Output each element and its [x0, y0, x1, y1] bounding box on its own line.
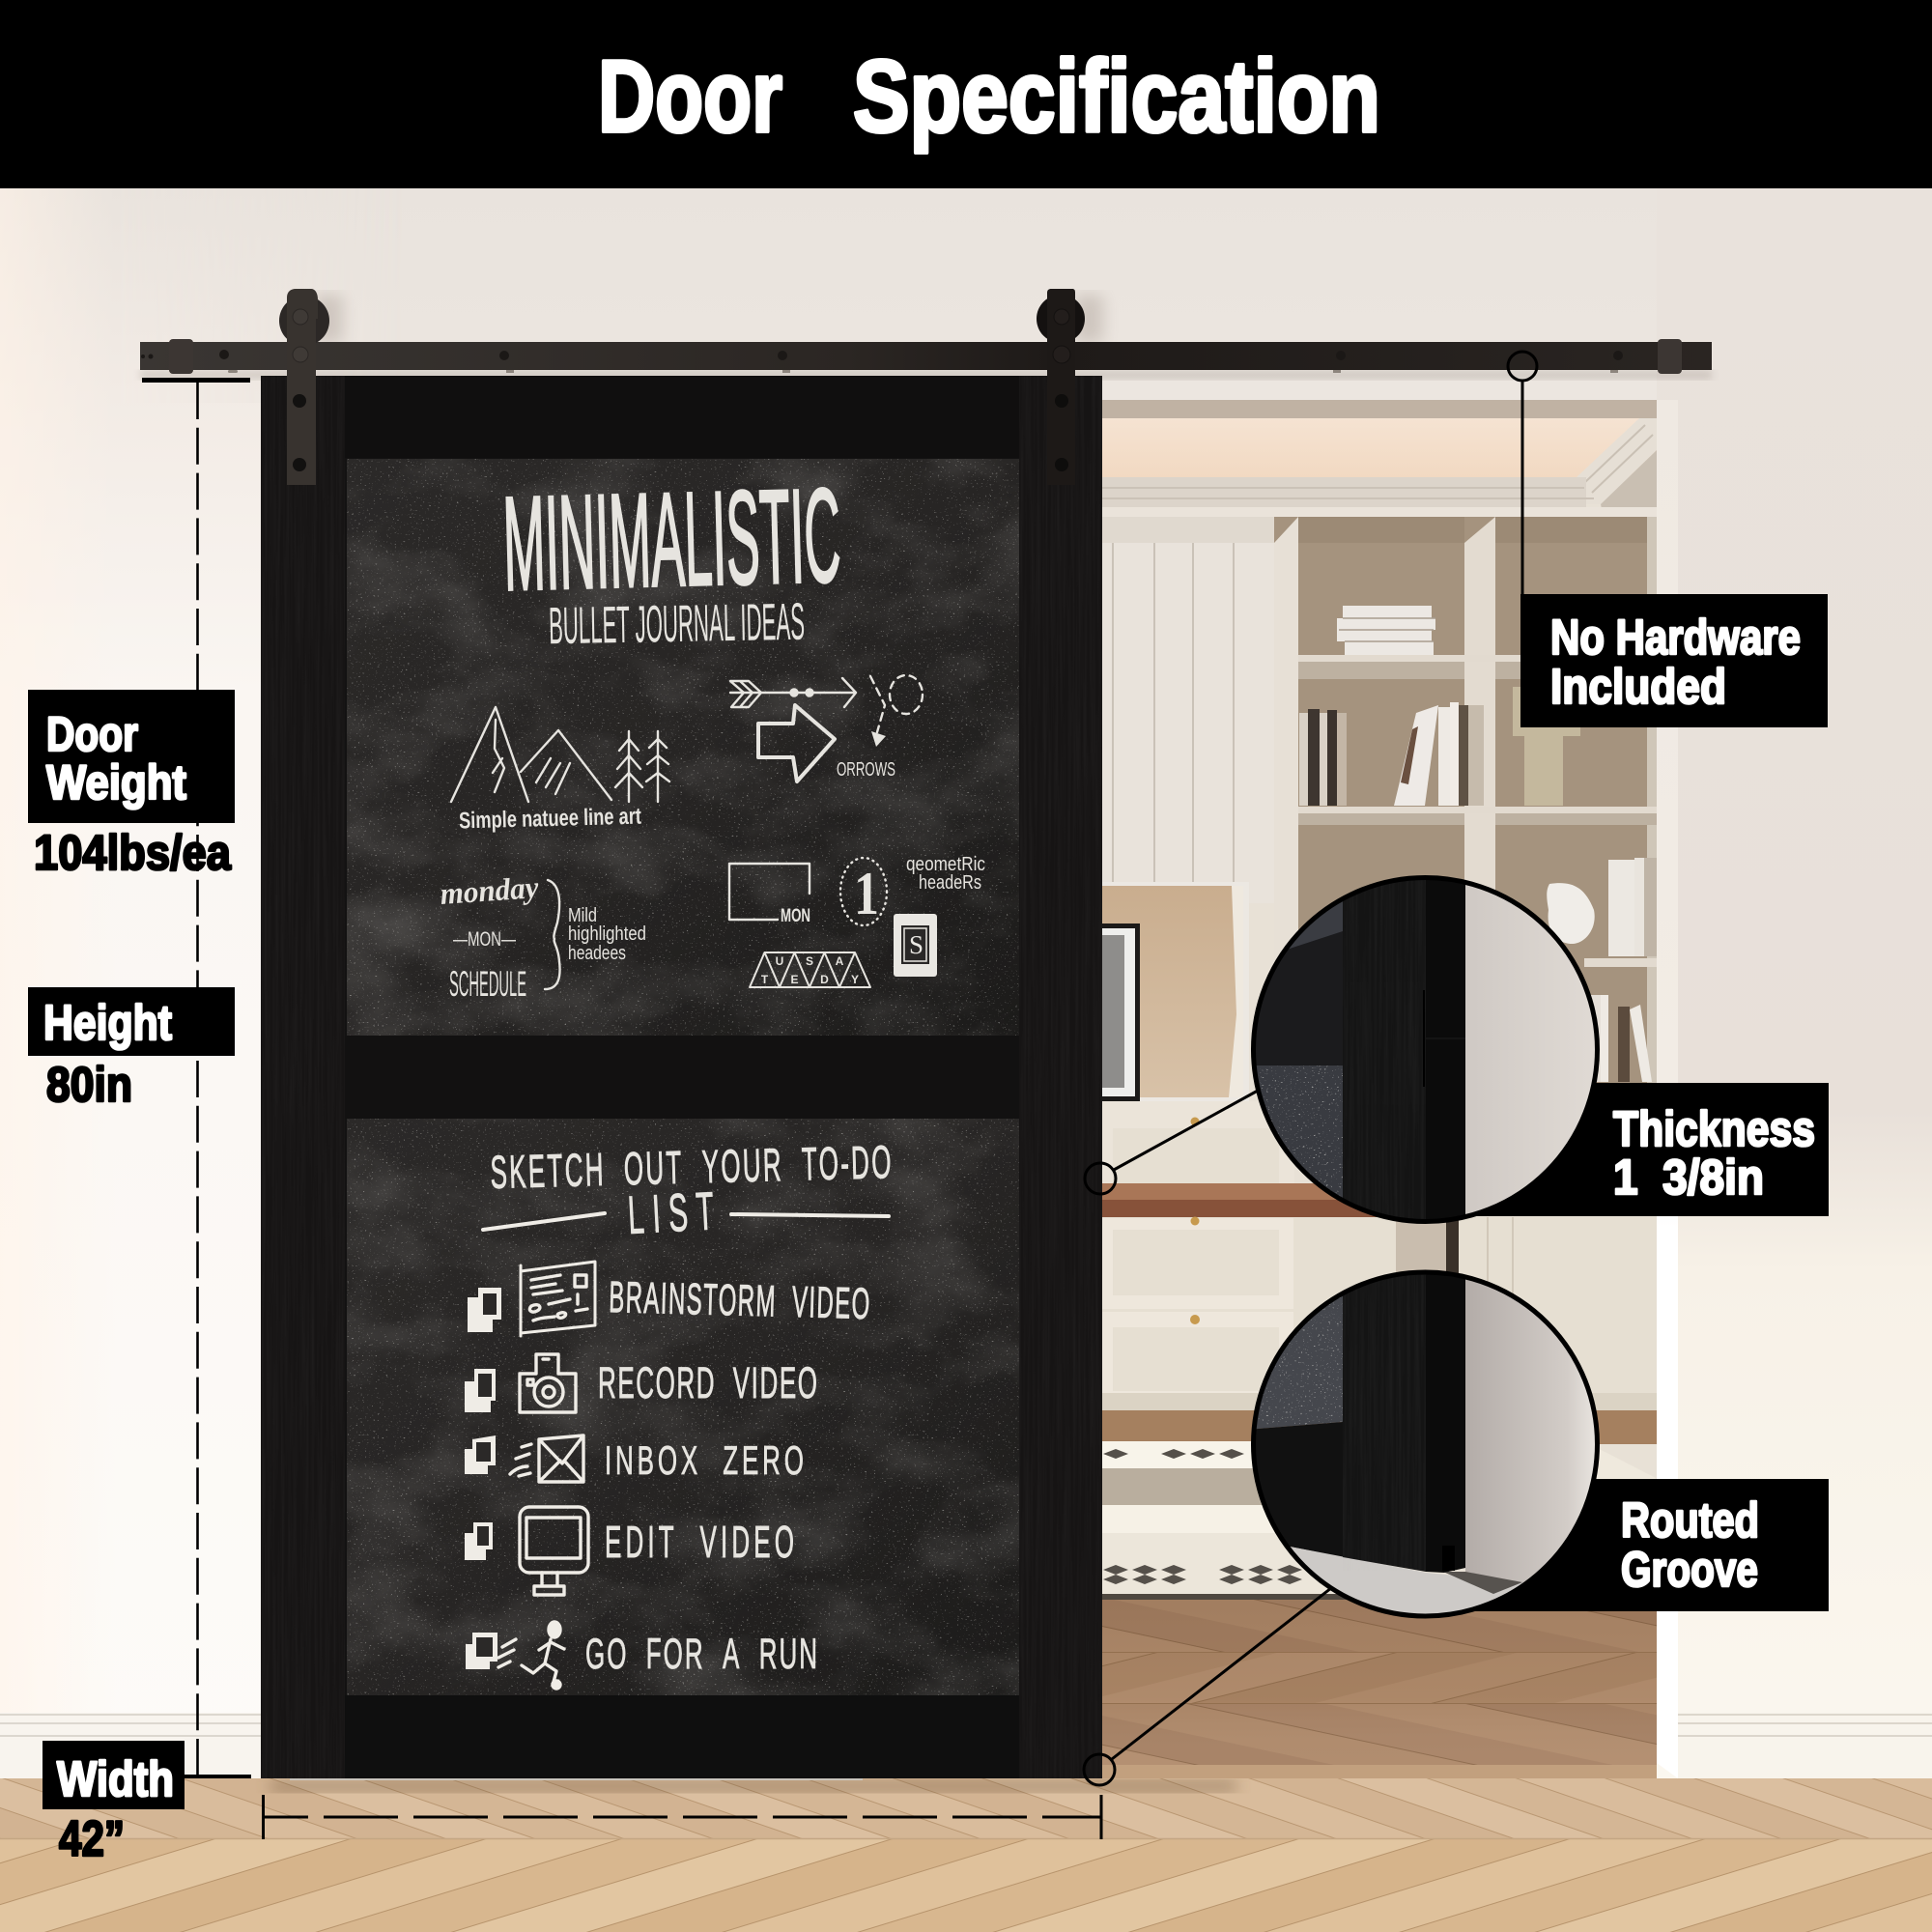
callout: height: Height	[43, 995, 172, 1050]
callout: door weight: Weight	[46, 755, 186, 810]
track bolts	[141, 350, 1623, 360]
callout: thickness: 1 3/8in	[1613, 1150, 1764, 1205]
sliding track	[140, 339, 1712, 374]
shelf books and decor	[1299, 606, 1657, 1082]
chalk: numbered circle	[840, 858, 887, 927]
callout: routed groove: Routed	[1621, 1492, 1759, 1548]
chalk: geometric headers caption: headeRs	[919, 872, 981, 894]
main floor	[0, 1778, 1932, 1932]
leader: no hardware	[1508, 352, 1537, 594]
hanger: left	[279, 289, 329, 485]
chalk: geometric headers caption: qeometRic	[906, 854, 985, 875]
chalk: brainstorm video: BRAINSTORM VIDEO	[609, 1272, 870, 1328]
chalk: checkboxes	[465, 1288, 501, 1669]
chalk: to-do heading: SKETCH OUT YOUR TO-DO	[490, 1137, 892, 1199]
chalk: go for a run: GO FOR A RUN	[585, 1630, 817, 1678]
chalk: mon: —MON—	[453, 928, 516, 951]
icon: whiteboard	[521, 1262, 595, 1336]
chalk: brace caption: headees	[568, 943, 626, 964]
callout: height	[28, 987, 235, 1056]
title bar	[0, 0, 1932, 188]
icon: camera	[520, 1354, 576, 1412]
callout: thickness: Thickness	[1613, 1101, 1815, 1156]
chalk: brace caption: highlighted	[568, 923, 646, 945]
chalk: record video: RECORD VIDEO	[598, 1357, 817, 1407]
chalk: brace	[545, 880, 560, 989]
chalk: mountains and trees	[451, 707, 669, 802]
hanger: right	[1037, 289, 1085, 485]
right baseboard	[1678, 1713, 1932, 1778]
chalk: inbox zero: INBOX ZERO	[605, 1439, 804, 1484]
chalk: edit video: EDIT VIDEO	[605, 1518, 794, 1568]
chalk: tuesday banner: E	[790, 973, 799, 986]
track end stops	[169, 339, 1682, 374]
panelled wall	[1112, 543, 1235, 882]
sliding barn door: MINIMALISTIC	[501, 461, 842, 619]
value: width: 42”	[59, 1811, 125, 1867]
chalk: letter s box	[894, 914, 937, 977]
detail circle: routed groove	[1246, 1265, 1610, 1623]
chalk: tuesday banner: A	[836, 954, 844, 968]
chalk: list underlines	[483, 1213, 889, 1230]
interior room seen through the opening	[1101, 400, 1657, 1778]
chalk: list: LIST	[626, 1182, 716, 1245]
callout: width: Width	[57, 1751, 174, 1806]
chalk: nature caption: Simple natuee line art	[459, 804, 641, 834]
chalk: tuesday banner: T	[761, 973, 769, 986]
icon: monitor	[520, 1507, 588, 1595]
height dimension line	[142, 378, 251, 1778]
interior parquet floor	[1102, 1600, 1657, 1778]
callout: thickness	[1468, 1083, 1829, 1216]
chalk: letter s box: S	[909, 930, 923, 959]
chalk: tuesday banner: D	[820, 973, 829, 986]
callout: door weight	[28, 690, 235, 823]
callout: routed groove: Groove	[1621, 1542, 1758, 1597]
chalk: small arrowhead	[871, 731, 886, 747]
value: door weight: 104lbs/ea	[34, 825, 232, 880]
door jamb	[1657, 400, 1678, 1778]
chalk: rectangular header	[729, 864, 810, 920]
chalk: arrows caption: ORROWS	[837, 759, 895, 781]
chalk: numbered circle: 1	[854, 859, 879, 927]
width dimension line	[263, 1795, 1101, 1839]
callout: no hardware: No Hardware	[1550, 610, 1801, 665]
back floor and rug	[1101, 1410, 1657, 1600]
callout: door weight: Door	[46, 707, 138, 761]
bookshelf unit	[1274, 517, 1657, 1116]
sliding barn door: BULLET JOURNAL IDEAS	[549, 593, 806, 655]
detail circle: door thickness	[1246, 869, 1613, 1230]
chalkboard panel: lower	[347, 1119, 1019, 1695]
leader: thickness	[1085, 1091, 1258, 1194]
callout: width	[43, 1741, 185, 1809]
chalk: brace caption	[568, 905, 646, 964]
rail shadow on wall	[140, 370, 1712, 380]
callout: no hardware	[1520, 594, 1828, 727]
door rails	[345, 376, 1019, 1778]
chalk: arrows	[730, 675, 923, 781]
chalk: geometric headers caption	[906, 854, 985, 894]
callout: no hardware: Included	[1550, 659, 1726, 714]
icon: mail	[510, 1435, 583, 1482]
chalk: tuesday banner: S	[806, 954, 813, 968]
sliding barn door	[261, 376, 1102, 1778]
sliding barn door: SCHEDULE	[449, 964, 526, 1004]
title: Door	[598, 40, 782, 154]
soffit and cove light	[1102, 400, 1657, 517]
chalk: tuesday banner: Y	[851, 973, 859, 986]
door stiles	[261, 376, 1102, 1778]
left baseboard	[0, 1713, 261, 1778]
chalk: monday: monday	[439, 869, 540, 911]
icon: runner	[498, 1622, 564, 1689]
callout: routed groove	[1468, 1479, 1829, 1611]
cabinets and counter	[1102, 1101, 1657, 1410]
chalkboard panel: upper	[347, 459, 1019, 1036]
chalk: tuesday banner	[750, 952, 870, 987]
leader: routed groove	[1084, 1588, 1331, 1785]
title: Specification	[853, 40, 1380, 154]
hanger shadows on wall	[314, 295, 1103, 343]
chalk: brace caption: Mild	[568, 905, 597, 926]
door bottom edge	[290, 1778, 863, 1780]
door shadow on floor	[270, 1780, 1236, 1792]
framed art	[1102, 882, 1249, 1101]
value: height: 80in	[46, 1057, 132, 1112]
chalk: mon label: MON	[781, 906, 810, 926]
chalk: tuesday banner: U	[776, 954, 783, 968]
